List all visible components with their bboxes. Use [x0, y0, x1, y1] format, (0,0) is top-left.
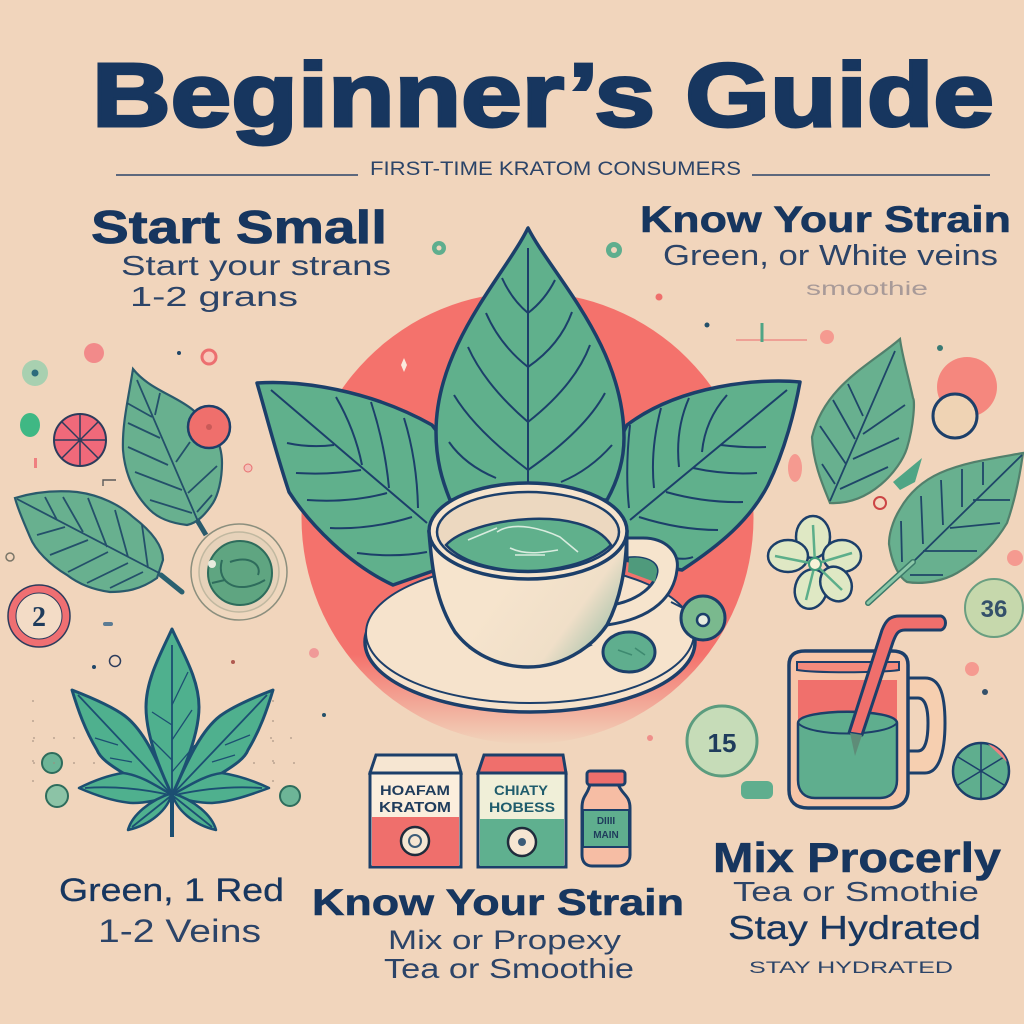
number 2 badge — [8, 585, 70, 647]
left upper leaf with berry — [123, 369, 230, 535]
dotted grid — [33, 700, 295, 795]
mug with straw — [789, 616, 946, 808]
product: green box: CHIATY — [494, 782, 549, 798]
small left dots — [6, 343, 300, 807]
product: red kratom box: KRATOM — [379, 799, 451, 816]
product: green box — [478, 755, 566, 867]
right lower leaf — [868, 453, 1023, 603]
product: jar — [582, 771, 630, 866]
product: red kratom box: HOAFAM — [380, 782, 450, 798]
number 36 badge — [965, 579, 1023, 637]
product: jar: DIIII — [597, 816, 615, 827]
small right tablet — [741, 743, 1009, 799]
heading: know your strain top — [640, 199, 1011, 300]
caption: green red veins: 1-2 Veins — [98, 913, 261, 949]
number 15 badge — [687, 706, 757, 776]
cannabis leaf — [72, 629, 273, 837]
caption: green red veins: Green, 1 Red — [59, 872, 284, 908]
heading: start small: Start your strans — [121, 250, 391, 281]
caption: know your strain bottom: Tea or Smoothie — [384, 953, 634, 984]
heading: start small: Start Small — [91, 201, 387, 253]
caption: green red veins — [59, 872, 284, 949]
right main leaf — [600, 381, 800, 570]
heading: know your strain top: smoothie — [806, 279, 928, 300]
right upper leaf — [812, 339, 914, 503]
right berries — [933, 357, 997, 438]
caption: mix properly: Tea or Smothie — [733, 876, 979, 907]
caption: know your strain bottom — [312, 882, 684, 984]
caption: mix properly: Mix Procerly — [713, 834, 1002, 881]
tablet and small pill — [603, 596, 725, 672]
product: jar: MAIN — [593, 830, 619, 841]
title: Beginner’s Guide — [92, 46, 994, 146]
left flower — [54, 414, 106, 466]
heading: start small — [91, 201, 391, 312]
product: green box: HOBESS — [489, 799, 555, 815]
saucer — [365, 563, 695, 712]
circled green ball — [191, 524, 287, 620]
caption: mix properly — [713, 834, 1002, 977]
heading: know your strain top: Green, or White veins — [663, 240, 998, 272]
subtitle: FIRST-TIME KRATOM CONSUMERS — [370, 159, 741, 180]
top main leaf — [436, 228, 624, 500]
number 15 badge: 15 — [708, 728, 736, 758]
caption: mix properly: STAY HYDRATED — [749, 958, 953, 977]
number 36 badge: 36 — [981, 596, 1007, 623]
caption: mix properly: Stay Hydrated — [728, 909, 981, 946]
teacup — [429, 483, 677, 667]
product: red kratom box — [370, 755, 461, 867]
heading: start small: 1-2 grans — [130, 281, 298, 312]
left main leaf — [257, 382, 475, 585]
number 2 badge: 2 — [32, 602, 46, 633]
right flower — [768, 516, 861, 612]
caption: know your strain bottom: Mix or Propexy — [388, 925, 622, 955]
caption: know your strain bottom: Know Your Strain — [312, 882, 684, 923]
left lower leaf — [15, 491, 182, 592]
right small accents — [231, 241, 1023, 741]
red sun circle — [302, 292, 754, 744]
heading: know your strain top: Know Your Strain — [640, 199, 1011, 240]
